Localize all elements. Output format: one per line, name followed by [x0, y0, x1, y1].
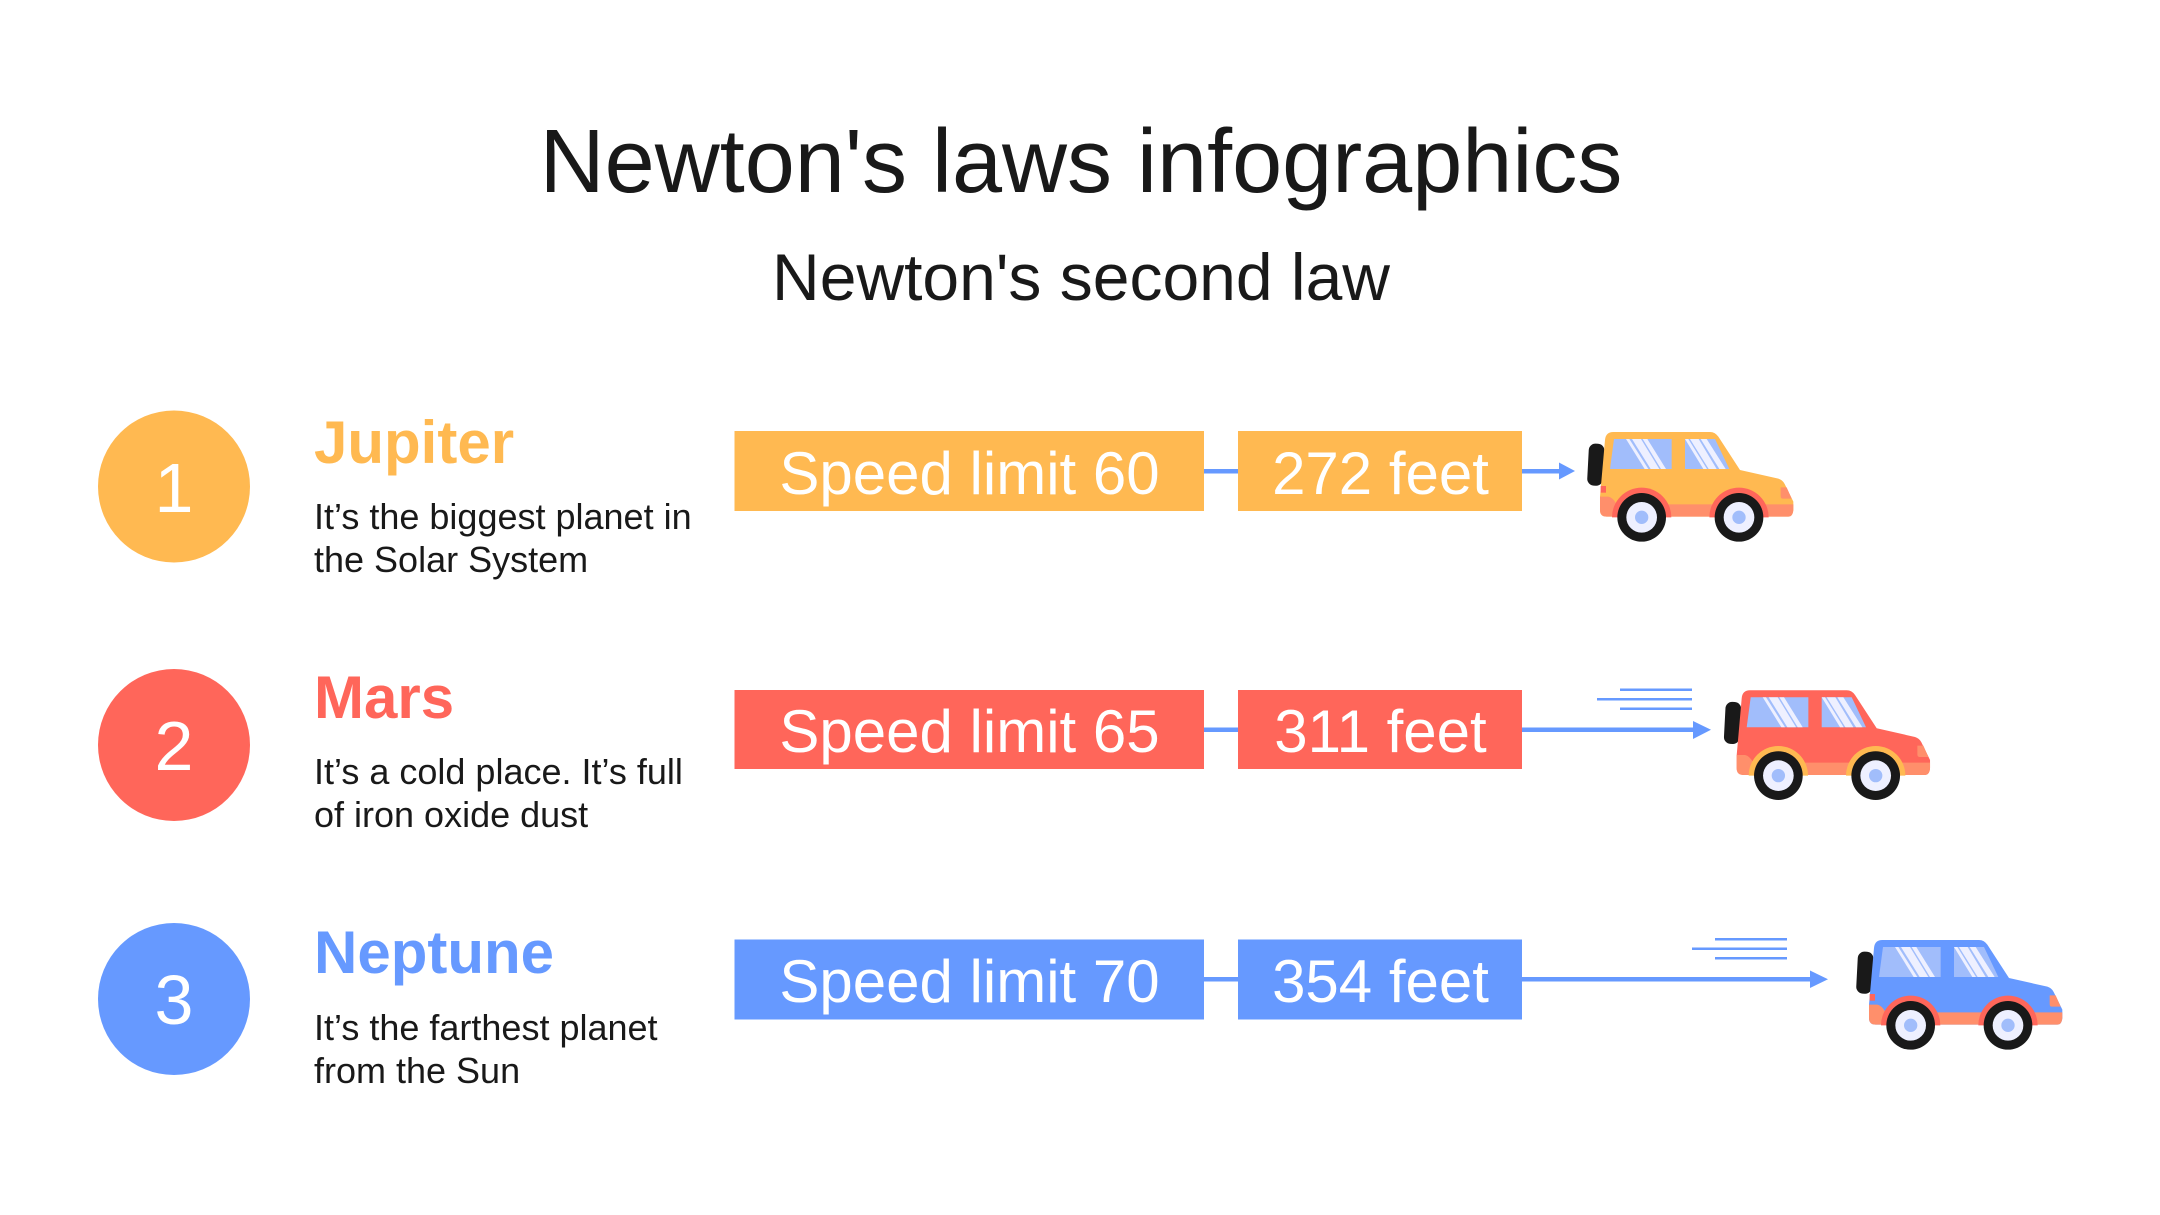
distance box	[1238, 690, 1522, 769]
speed limit box: Speed limit 65	[779, 698, 1160, 765]
subtitle: Newton's second law	[772, 240, 1390, 314]
connector line	[1204, 469, 1238, 474]
description Jupiter: the Solar System	[314, 539, 588, 580]
speed lines	[1597, 688, 1692, 710]
connector line	[1204, 728, 1238, 732]
arrow	[1522, 462, 1575, 480]
distance box	[1238, 431, 1522, 511]
distance box: 272 feet	[1272, 440, 1489, 507]
description Jupiter: It’s the biggest planet in	[314, 496, 692, 537]
arrow	[1522, 721, 1711, 739]
distance box	[1238, 940, 1522, 1020]
description Mars: of iron oxide dust	[314, 794, 588, 835]
row 1: Jupiter	[98, 409, 1793, 580]
speed limit box: Speed limit 60	[779, 440, 1160, 507]
distance box: 311 feet	[1274, 698, 1487, 765]
heading Jupiter: Jupiter	[314, 409, 514, 476]
speed limit box	[734, 940, 1204, 1020]
orange car	[1587, 432, 1793, 542]
speed limit box	[734, 431, 1204, 511]
speed lines	[1692, 938, 1787, 960]
description Neptune: It’s the farthest planet	[314, 1007, 658, 1048]
heading Mars: Mars	[314, 664, 454, 731]
speed limit box	[734, 690, 1204, 769]
number badge 3: 3	[155, 961, 193, 1039]
heading Neptune: Neptune	[314, 919, 554, 986]
number badge 1	[98, 410, 250, 562]
number badge 1: 1	[155, 449, 193, 527]
arrow	[1522, 970, 1828, 988]
number badge 3	[98, 923, 250, 1075]
connector line	[1204, 977, 1238, 982]
red car	[1724, 690, 1930, 800]
title: Newton's laws infographics	[540, 112, 1622, 212]
number badge 2: 2	[155, 707, 193, 785]
speed limit box: Speed limit 70	[779, 948, 1160, 1015]
description Neptune: from the Sun	[314, 1050, 520, 1091]
blue car	[1856, 940, 2062, 1050]
row 3: Neptune	[98, 919, 2062, 1091]
distance box: 354 feet	[1272, 948, 1489, 1015]
row 2: Mars	[98, 664, 1930, 835]
number badge 2	[98, 669, 250, 821]
description Mars: It’s a cold place. It’s full	[314, 751, 683, 792]
